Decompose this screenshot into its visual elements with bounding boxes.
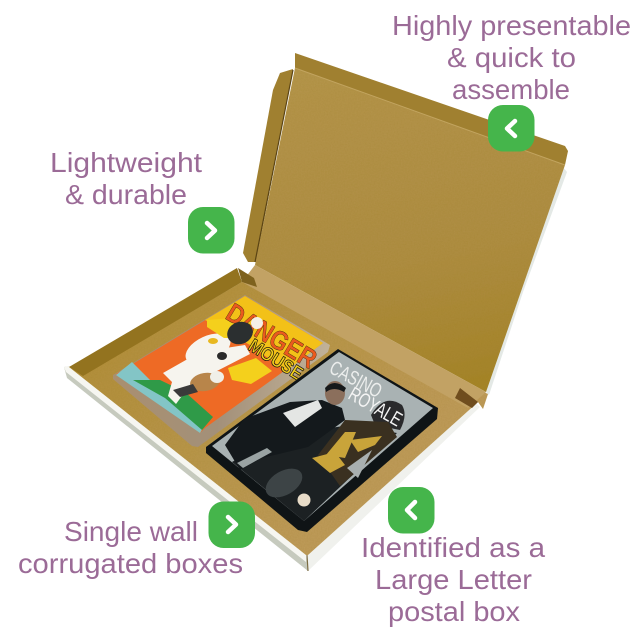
- icon: right chevron button: [208, 502, 255, 548]
- teal strip: [116, 362, 203, 433]
- dog head: [210, 371, 224, 383]
- back fold strip: [242, 265, 486, 408]
- lid top crease: [295, 68, 565, 165]
- brown dog: [189, 371, 221, 393]
- car: [261, 463, 307, 503]
- cover grey: [212, 352, 433, 521]
- light wedge: [237, 448, 272, 468]
- black case: [206, 349, 438, 532]
- DVD Danger Mouse: [113, 295, 330, 447]
- lid top flap: [295, 53, 568, 165]
- base white front-left side: [64, 366, 308, 571]
- label: Identified as a: [361, 532, 545, 563]
- man head: [325, 381, 345, 405]
- cover yellow top: [205, 296, 323, 371]
- man hair: [325, 383, 346, 392]
- bomb spark: [251, 317, 263, 329]
- callout: single wall: [18, 502, 255, 579]
- yellow burst: [228, 358, 272, 384]
- corner flap: [238, 268, 257, 287]
- casino building: [318, 420, 397, 486]
- icon: left chevron button: [388, 487, 434, 534]
- cover orange: [116, 296, 323, 433]
- label: Large Letter: [375, 564, 532, 595]
- box illustration: [64, 53, 568, 571]
- label: [361, 532, 545, 627]
- back wall: [69, 268, 242, 376]
- light reflection: [347, 450, 372, 478]
- age rating: [298, 494, 310, 506]
- label: Single wall: [64, 516, 198, 547]
- title Royale: ROYALE: [344, 383, 406, 431]
- label: Highly presentable: [392, 10, 631, 41]
- gold lights: [312, 432, 382, 473]
- lid left flap: [243, 69, 293, 262]
- shirt: [283, 400, 322, 427]
- DVD Casino Royale: [206, 349, 438, 532]
- lid white outer edge: [486, 167, 567, 395]
- callout: presentable: [392, 10, 631, 152]
- yellow left block: [207, 318, 237, 338]
- label: & quick to: [447, 42, 576, 73]
- callout: large letter: [361, 487, 545, 627]
- lower dark art: [232, 425, 397, 521]
- label: corrugated boxes: [18, 548, 243, 579]
- corner seam: [307, 555, 308, 571]
- white mouse: [163, 327, 250, 404]
- base white front-left highlight: [64, 366, 306, 562]
- label: assemble: [452, 74, 570, 105]
- corner notch: [455, 388, 478, 408]
- base white front-right side: [308, 403, 480, 571]
- title Danger: DANGER: [221, 297, 322, 375]
- black bomb: [224, 318, 256, 348]
- label: postal box: [388, 596, 520, 627]
- icon: right chevron button: [188, 207, 234, 254]
- label: [18, 516, 243, 579]
- dark dome: [371, 401, 405, 430]
- title Casino: CASINO: [326, 357, 385, 403]
- callout: lightweight: [50, 147, 234, 254]
- label: [50, 147, 202, 210]
- green hill: [133, 380, 213, 430]
- lid left crease: [255, 70, 293, 262]
- label: [392, 10, 631, 105]
- base floor: [69, 282, 488, 555]
- icon: left chevron button: [488, 105, 534, 152]
- label: Lightweight: [50, 147, 202, 178]
- label: & durable: [65, 179, 187, 210]
- clear case: [113, 295, 330, 447]
- lid inner panel: [255, 68, 565, 392]
- man suit: [225, 400, 345, 470]
- title Mouse: MOUSE: [244, 335, 306, 385]
- dark trousers: [173, 384, 198, 397]
